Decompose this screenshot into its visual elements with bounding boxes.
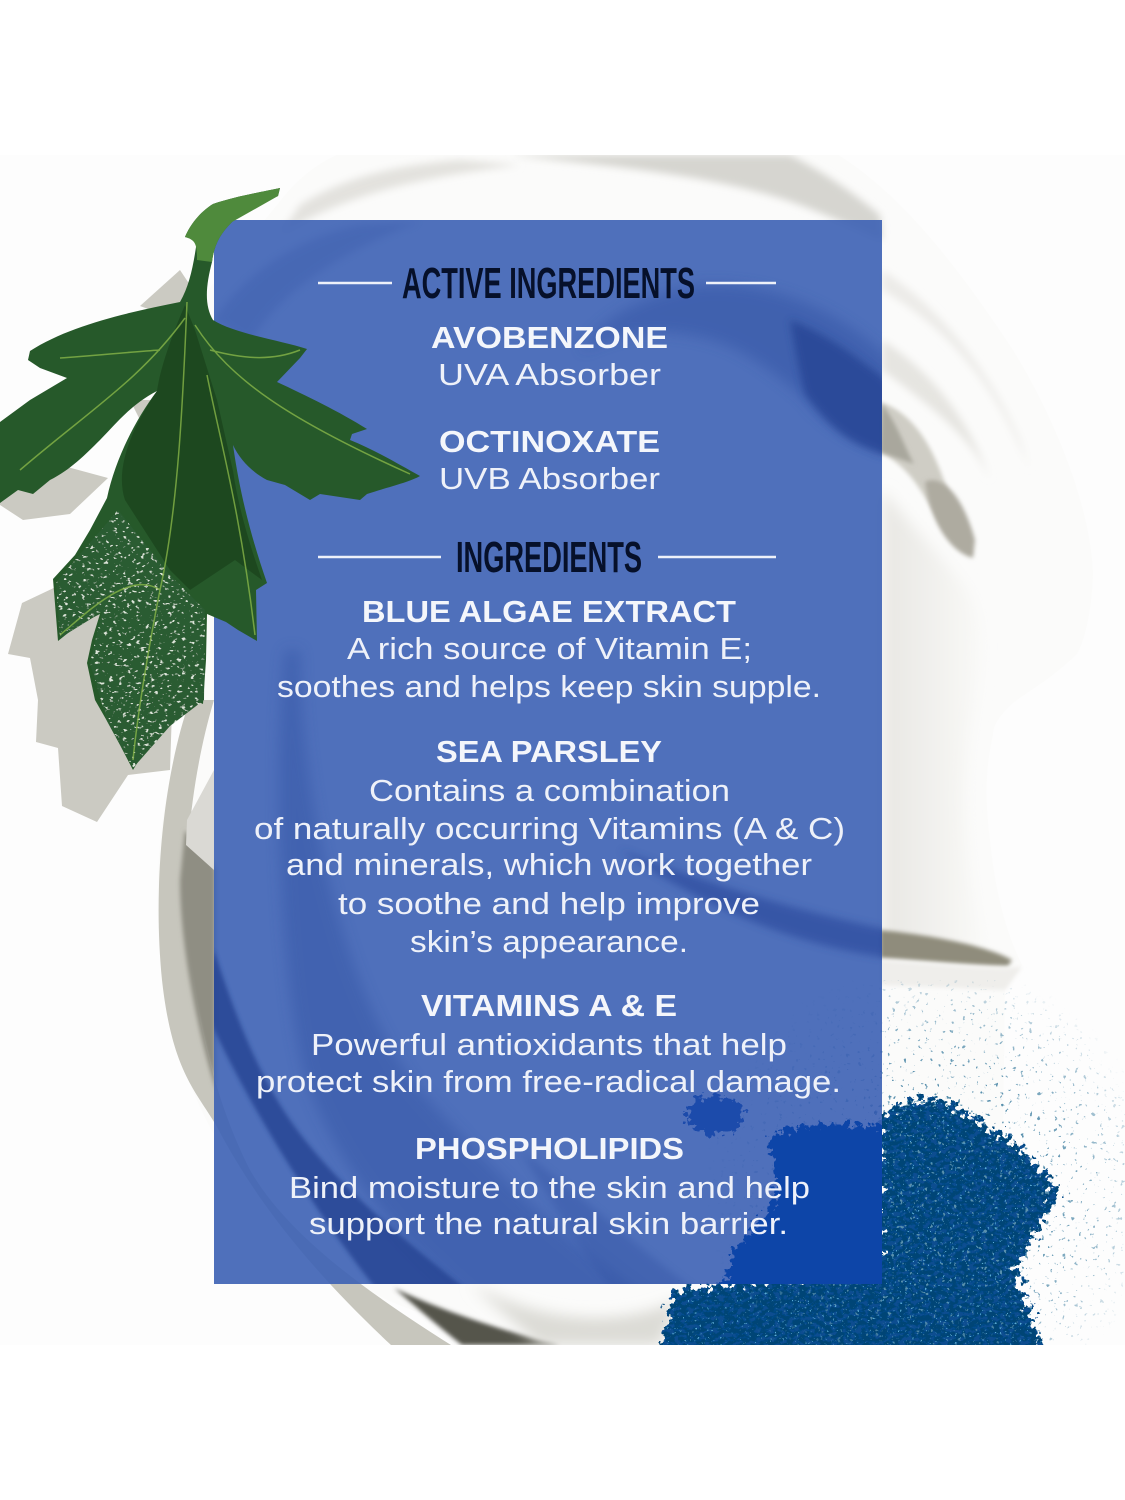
ingredient: phospholipids: Bind moisture to the skin and help [289, 1170, 810, 1205]
cream top ridges [510, 155, 882, 240]
cream fold hollow [882, 401, 948, 512]
leaf stem top [185, 188, 280, 262]
ingredient: avobenzone [431, 320, 668, 392]
powder seen through the panel [687, 1095, 890, 1295]
scattered powder specks [700, 980, 1125, 1345]
ingredient: blue algae extract: soothes and helps keep skin supple. [277, 669, 821, 704]
ingredient: vitamins a and e: Powerful antioxidants that help [311, 1027, 787, 1062]
leaf veins [20, 302, 410, 760]
ingredient: vitamins a and e: VITAMINS A & E [421, 988, 677, 1023]
ingredient: phospholipids [289, 1131, 810, 1241]
ingredient: sea parsley: SEA PARSLEY [436, 734, 662, 769]
ingredient: blue algae extract: BLUE ALGAE EXTRACT [362, 594, 736, 629]
ingredient: phospholipids: PHOSPHOLIPIDS [415, 1131, 684, 1166]
ingredient: blue algae extract [277, 594, 821, 704]
cream left arc [159, 700, 451, 1345]
blue powder pile [658, 1094, 1064, 1345]
heading: active ingredients: ACTIVE INGREDIENTS [402, 259, 695, 308]
ingredient: blue algae extract: A rich source of Vitamin E; [347, 631, 752, 666]
ingredient: sea parsley: to soothe and help improve [338, 886, 760, 921]
ingredient: sea parsley [254, 734, 845, 959]
ingredient: octinoxate [439, 424, 660, 496]
ingredient: octinoxate: OCTINOXATE [439, 424, 660, 459]
infographic canvas [0, 155, 1125, 1345]
ingredient: phospholipids: support the natural skin barrier. [309, 1206, 788, 1241]
ingredient: sea parsley: and minerals, which work together [286, 847, 812, 882]
ingredient: vitamins a and e: protect skin from free-radical damage. [256, 1064, 841, 1099]
cream smear [158, 150, 1093, 1345]
ingredient: avobenzone: UVA Absorber [438, 357, 661, 392]
cream folds seen through the panel [205, 222, 890, 1300]
ingredient: sea parsley: Contains a combination [369, 773, 730, 808]
leaf shaded centre lobe [122, 305, 262, 590]
leaf blade [0, 188, 420, 770]
leaf cast shadow [0, 270, 200, 822]
leaf [0, 188, 420, 770]
translucent blue panel [214, 220, 882, 1284]
ingredient: vitamins a and e [256, 988, 841, 1099]
cream lower crease [880, 930, 1012, 966]
ingredient: avobenzone: AVOBENZONE [431, 320, 668, 355]
ingredient: sea parsley: skin’s appearance. [410, 924, 688, 959]
leaf glossy lower lobe [56, 510, 205, 768]
ingredient: octinoxate: UVB Absorber [439, 461, 660, 496]
heading: ingredients: INGREDIENTS [456, 533, 642, 582]
ingredient: sea parsley: of naturally occurring Vitamins (A & C) [254, 811, 845, 846]
